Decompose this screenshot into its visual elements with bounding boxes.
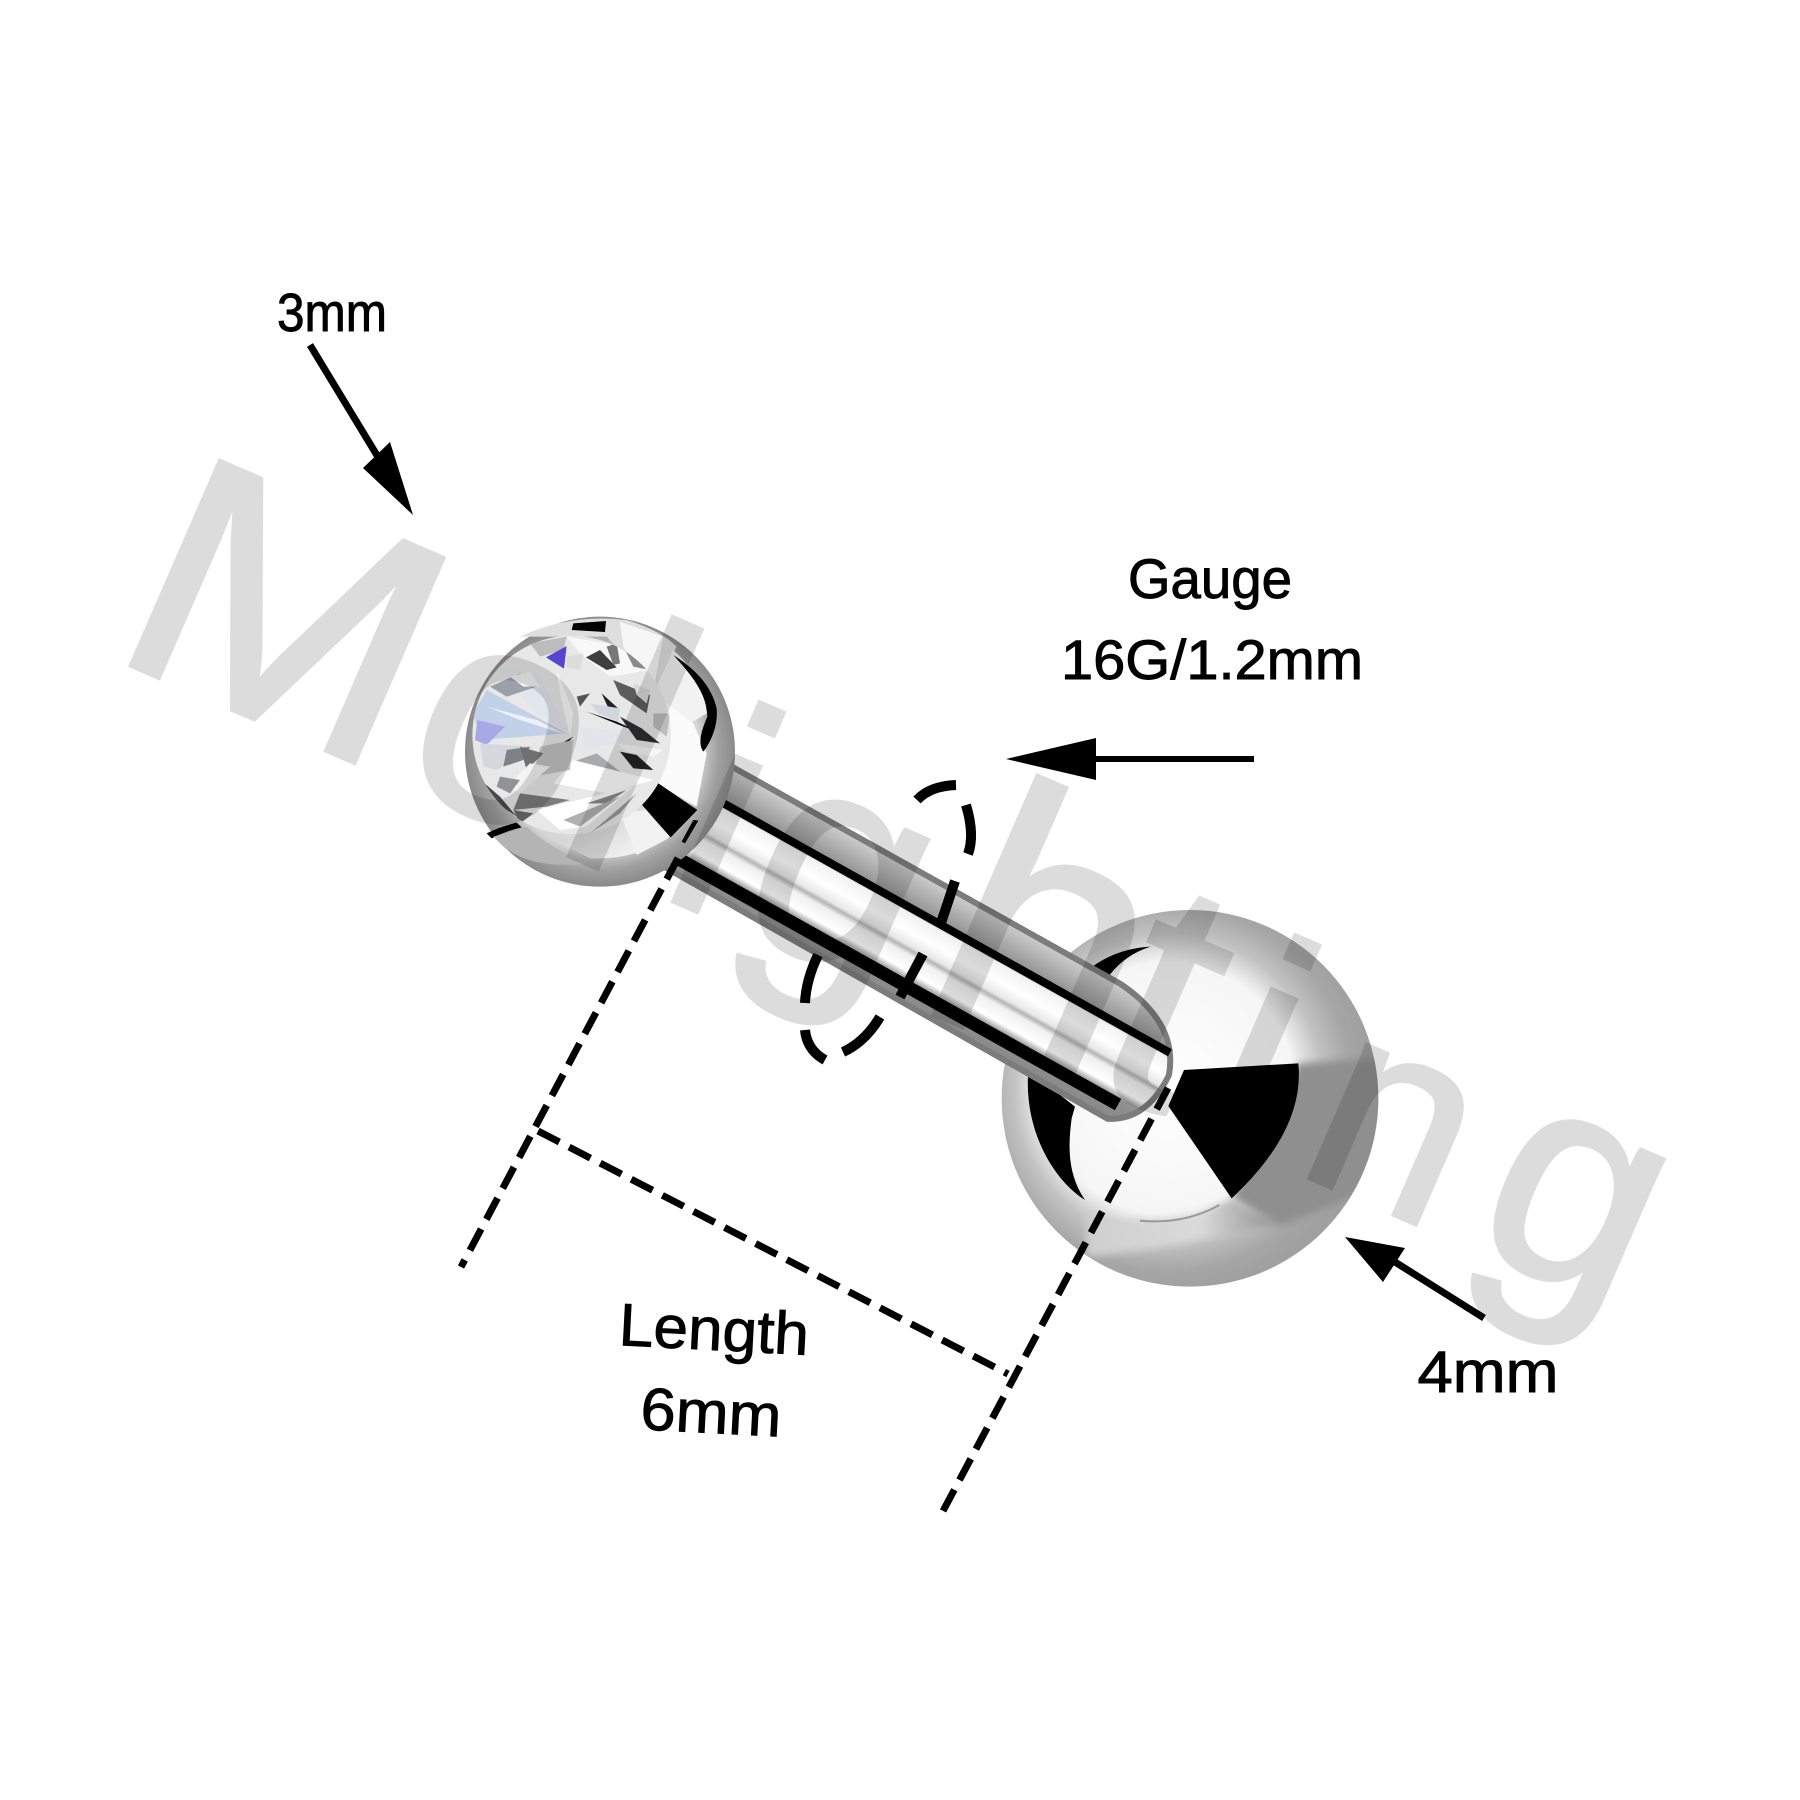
label: length [617, 1291, 811, 1450]
watermark [76, 385, 1748, 1383]
watermark: l [516, 548, 749, 949]
watermark: i [629, 644, 824, 979]
watermark: t [1055, 806, 1287, 1181]
watermark: g [1439, 997, 1727, 1373]
arrow: 3mm [310, 345, 413, 515]
watermark: h [880, 707, 1224, 1155]
label: gauge [1061, 547, 1363, 691]
label: length: Length [617, 1291, 811, 1368]
barbell diagram [128, 293, 1666, 1512]
watermark: g [704, 677, 991, 1053]
label: 3mm: 3mm [277, 283, 387, 343]
watermark: n [1268, 943, 1531, 1286]
icon: black reflections on ball [572, 621, 717, 843]
watermark: o [367, 530, 654, 905]
label: length: 6mm [639, 1375, 783, 1450]
big ball 4mm [1002, 910, 1393, 1287]
gauge dashed ellipse [805, 785, 971, 1060]
watermark: M [76, 385, 498, 839]
length dimension dashed lines [461, 858, 1168, 1511]
watermark: i [1165, 877, 1360, 1212]
label: 4mm: 4mm [1418, 1340, 1558, 1405]
label: gauge: Gauge [1128, 547, 1292, 610]
arrow: 4mm [1345, 1237, 1484, 1318]
small ball with gem 3mm [465, 617, 735, 887]
arrow: gauge [1006, 738, 1254, 780]
gem [472, 636, 671, 834]
bar [619, 737, 1196, 1135]
label: gauge: 16G/1.2mm [1061, 628, 1363, 691]
